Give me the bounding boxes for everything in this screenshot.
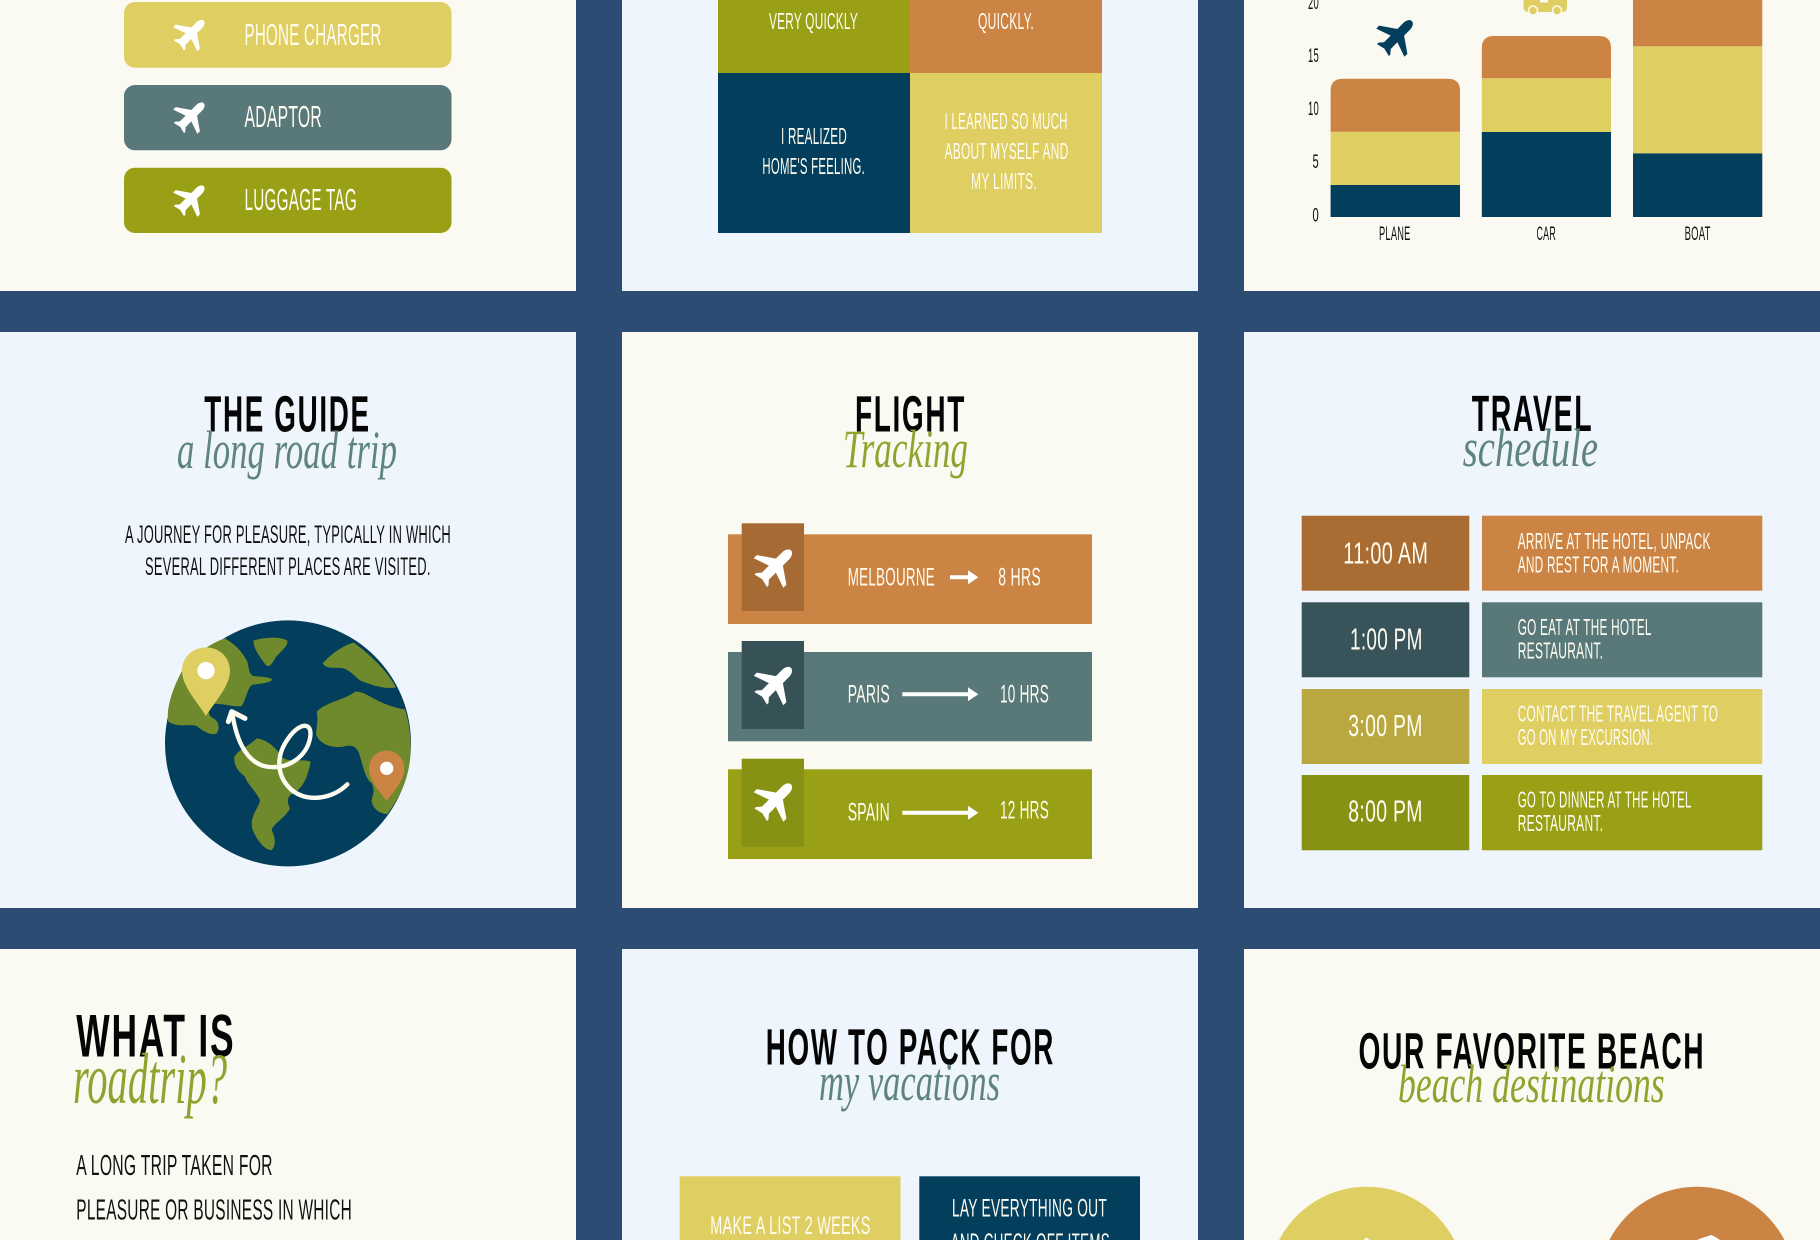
- card: lay everything out: [919, 1176, 1140, 1240]
- row: 3:00 PM: GO ON MY EXCURSION.: [1518, 724, 1653, 750]
- button: adaptor: [124, 85, 452, 150]
- y axis labels: [1308, 0, 1319, 227]
- circle: yellow destination: [1279, 1187, 1454, 1240]
- row: melbourne: MELBOURNE: [848, 564, 935, 591]
- row: melbourne: [728, 523, 1092, 624]
- card: lay everything out: LAY EVERYTHING OUT: [952, 1196, 1107, 1223]
- land: [168, 638, 411, 850]
- script subtitle: beach destinations: [1398, 1054, 1665, 1114]
- panel: travel schedule: [1244, 332, 1820, 908]
- panel: transport bar chart: [1244, 0, 1820, 291]
- row: 3:00 PM: 3:00 PM: [1348, 709, 1423, 743]
- x axis labels: PLANE: [1379, 224, 1411, 245]
- route arrow: [232, 713, 347, 798]
- panel: the guide: [0, 332, 576, 908]
- script subtitle: my vacations: [819, 1052, 1000, 1112]
- icon: plane: [167, 9, 216, 58]
- row: 1:00 PM: [1302, 602, 1762, 677]
- icon: plane: [167, 174, 216, 223]
- bar: plane: [1331, 79, 1460, 217]
- row: 11:00 AM: 11:00 AM: [1343, 536, 1428, 570]
- cell: quickly: QUICKLY.: [978, 8, 1034, 34]
- script subtitle: roadtrip?: [73, 1039, 227, 1119]
- label: ADAPTOR: [244, 100, 322, 134]
- row: spain: SPAIN: [848, 800, 890, 827]
- pin: yellow: [182, 647, 230, 716]
- bar: car: [1482, 36, 1611, 217]
- bar: boat: [1633, 0, 1762, 217]
- description: [125, 522, 451, 581]
- row: 8:00 PM: 8:00 PM: [1348, 795, 1423, 829]
- heading: TRAVEL: [1472, 385, 1593, 442]
- row: paris: 10 HRS: [1000, 681, 1049, 708]
- heading: WHAT IS: [76, 1002, 235, 1070]
- panel: flight tracking: [622, 332, 1198, 908]
- cell: very quickly: VERY QUICKLY: [769, 8, 858, 34]
- cell: home's feeling: HOME'S FEELING.: [762, 153, 865, 179]
- row: 3:00 PM: [1302, 689, 1762, 764]
- row: paris: PARIS: [848, 681, 890, 708]
- row: 1:00 PM: 1:00 PM: [1350, 622, 1423, 656]
- script subtitle: a long road trip: [177, 420, 397, 480]
- icon: navy plane: [1369, 7, 1426, 64]
- label: LUGGAGE TAG: [244, 183, 357, 217]
- description: PLEASURE OR BUSINESS IN WHICH: [76, 1194, 352, 1226]
- row: 11:00 AM: [1302, 516, 1762, 591]
- description: A LONG TRIP TAKEN FOR: [76, 1150, 273, 1182]
- cell: learned about myself: I LEARNED SO MUCH: [944, 108, 1068, 134]
- panel: how to pack: [622, 949, 1198, 1240]
- row: 8:00 PM: RESTAURANT.: [1518, 810, 1603, 836]
- row: 8:00 PM: [1302, 775, 1762, 850]
- row: paris: [728, 641, 1092, 741]
- heading: HOW TO PACK FOR: [766, 1018, 1055, 1075]
- x axis labels: [1379, 224, 1711, 245]
- circle: orange destination: [1609, 1187, 1784, 1240]
- row: melbourne: 8 HRS: [998, 564, 1041, 591]
- icon: yellow car: [1524, 0, 1567, 15]
- description: [76, 1150, 352, 1226]
- card: make a list: MAKE A LIST 2 WEEKS: [710, 1213, 871, 1240]
- row: 1:00 PM: GO EAT AT THE HOTEL: [1518, 614, 1652, 640]
- cell: learned about myself: ABOUT MYSELF AND: [944, 138, 1068, 164]
- panel: what is roadtrip: [0, 949, 576, 1240]
- pin: orange: [369, 751, 404, 801]
- panel: transport bar chart: BOAT: [1685, 224, 1711, 245]
- cell: home's feeling: [718, 73, 910, 233]
- row: spain: 12 HRS: [1000, 797, 1049, 824]
- button: luggage tag: [124, 168, 452, 233]
- panel: transport bar chart: 15: [1308, 46, 1319, 67]
- button: phone charger: [124, 2, 452, 68]
- cell: quickly: [910, 0, 1102, 73]
- cell: very quickly: [718, 0, 910, 73]
- script subtitle: Tracking: [843, 419, 968, 479]
- cell: home's feeling: I REALIZED: [781, 123, 847, 149]
- script subtitle: schedule: [1463, 418, 1598, 478]
- y axis labels: 5: [1312, 152, 1319, 173]
- row: spain: [728, 759, 1092, 859]
- heading: FLIGHT: [855, 386, 966, 443]
- button: phone charger: PHONE CHARGER: [244, 18, 382, 52]
- description: SEVERAL DIFFERENT PLACES ARE VISITED.: [145, 554, 431, 581]
- panel: favorite beach: [1244, 949, 1820, 1240]
- heading: THE GUIDE: [204, 386, 371, 443]
- globe illustration: [165, 620, 411, 866]
- icon: plane: [167, 91, 216, 140]
- cell: learned about myself: [910, 73, 1102, 233]
- panel: packing list buttons: [0, 0, 576, 291]
- cell: learned about myself: MY LIMITS.: [971, 168, 1037, 194]
- description: A JOURNEY FOR PLEASURE, TYPICALLY IN WHICH: [125, 522, 451, 549]
- panel: transport bar chart: 10: [1308, 99, 1319, 120]
- y axis labels: 0: [1312, 206, 1319, 227]
- x axis labels: CAR: [1536, 224, 1556, 245]
- panel: what I learned grid: [622, 0, 1198, 291]
- row: 1:00 PM: RESTAURANT.: [1518, 637, 1603, 663]
- card: make a list: [680, 1176, 900, 1240]
